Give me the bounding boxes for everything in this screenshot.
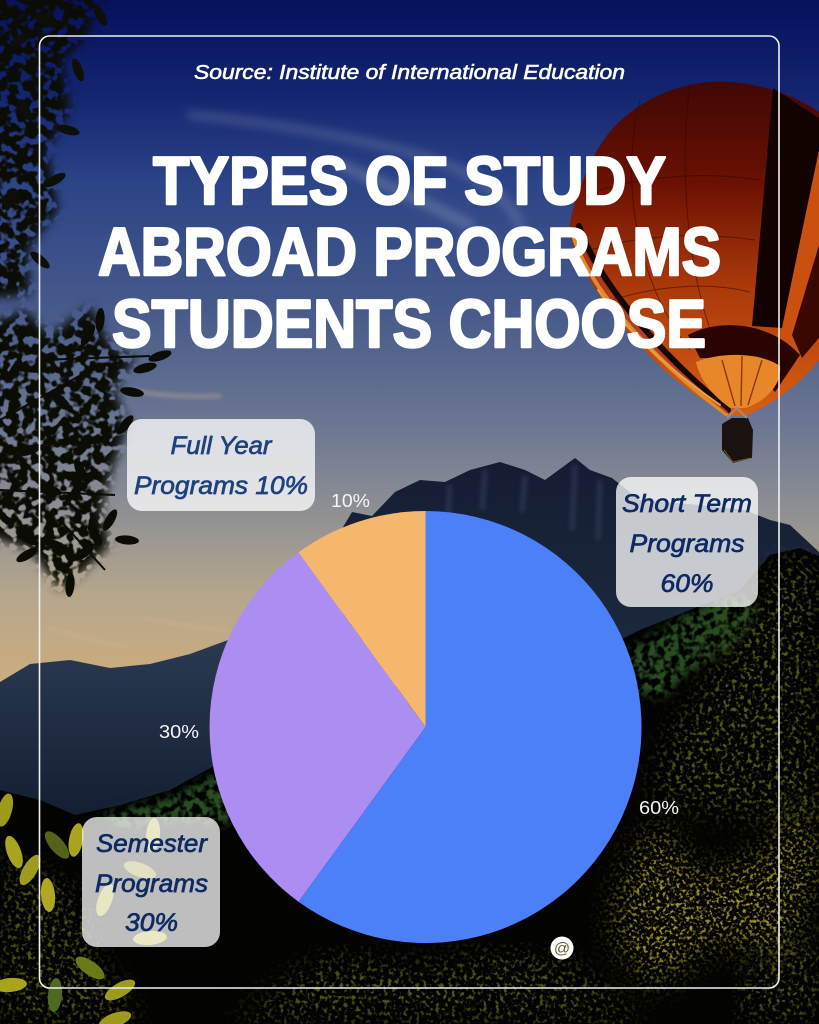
balloon basket (722, 418, 753, 463)
background: rock mountain (343, 458, 819, 660)
callout: full year programs: Programs 10% (134, 472, 308, 500)
callout: semester programs: 30% (125, 909, 178, 937)
balloon orange stripes (768, 150, 819, 365)
callout: short term programs: 60% (660, 570, 714, 598)
title line 1: TYPES OF STUDY (153, 143, 666, 219)
title line 2: ABROAD PROGRAMS (98, 214, 721, 290)
pie chart (210, 511, 642, 943)
value: 10%: 10% (331, 491, 370, 511)
value: 30%: 30% (159, 722, 199, 742)
pie value labels (159, 491, 679, 818)
background: rock highlights (448, 465, 600, 540)
title (98, 143, 721, 362)
foliage: lower left (0, 792, 168, 1024)
callout: full year programs (127, 419, 315, 511)
background: olive foliage upper right (650, 555, 819, 830)
callout: short term programs: Short Term (622, 490, 752, 518)
tree: upper left (0, 0, 110, 300)
slice: full year 10% (298, 511, 426, 727)
background: far hazy ridge (0, 640, 300, 830)
background: bright foliage right (610, 790, 819, 990)
callout: short term programs: Programs (630, 530, 744, 558)
callout: semester programs: Semester (96, 830, 209, 858)
callout: full year programs: Full Year (170, 432, 273, 460)
icon: at sign badge (550, 936, 574, 960)
icon: at sign badge: @ (554, 940, 570, 958)
balloon envelope (569, 82, 819, 416)
background: dark ground (0, 548, 819, 1024)
balloon skirt (688, 325, 800, 392)
background: low clouds (50, 390, 225, 648)
balloon dark stripe (752, 88, 819, 328)
background: foliage bottom (230, 950, 650, 1024)
title line 3: STUDENTS CHOOSE (112, 286, 706, 362)
slice: semester 30% (210, 552, 426, 902)
background: green hill (628, 592, 760, 700)
value: 60%: 60% (639, 798, 679, 818)
background: foliage far bottom right (740, 930, 819, 1024)
slice: short term 60% (298, 511, 642, 943)
hot air balloon (569, 82, 819, 463)
tree branches (0, 356, 150, 570)
tree: centre left (0, 305, 173, 597)
callout: short term programs (616, 477, 758, 607)
callout: semester programs: Programs (95, 870, 208, 898)
background: green ridge left (100, 770, 238, 828)
source line: Source: Institute of International Education (194, 62, 625, 84)
background: clouds (190, 115, 520, 225)
balloon mouth (696, 355, 780, 408)
balloon edge stripes (572, 226, 728, 414)
callout: semester programs (82, 817, 220, 947)
balloon seams (590, 84, 760, 350)
